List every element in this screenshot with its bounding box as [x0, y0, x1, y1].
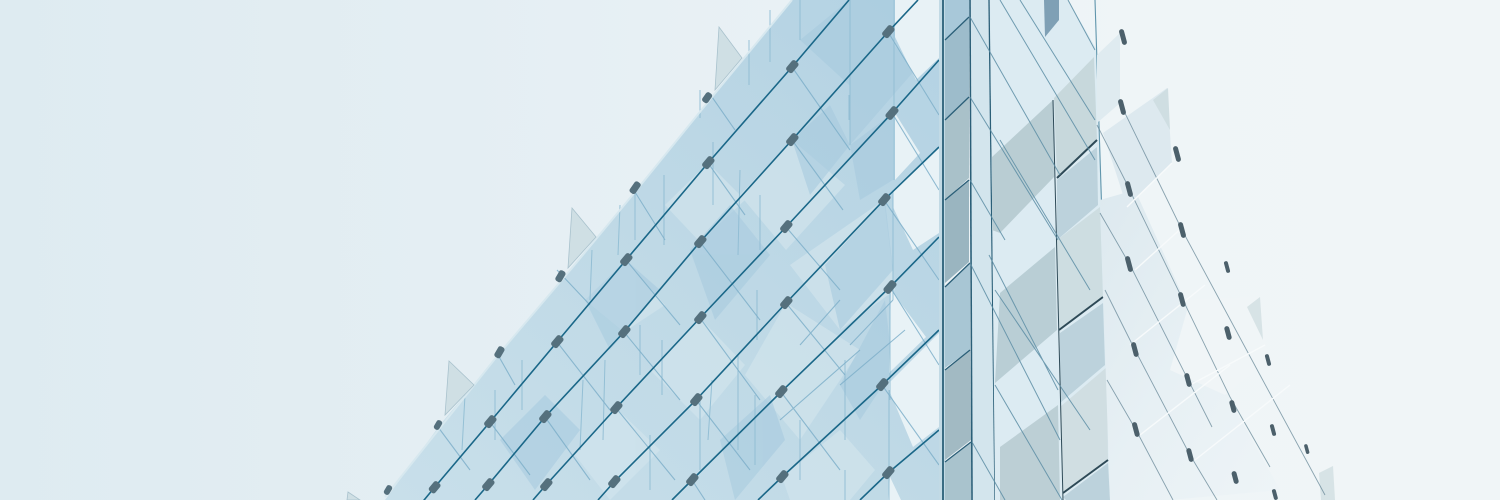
corner column: dark panels: [945, 0, 969, 40]
right facade: dark panel edges: [1053, 100, 1108, 500]
left facade: chevron pane edges: [438, 32, 939, 500]
right wing: pale glass panes: [1097, 33, 1120, 123]
right facade: right edge line: [1095, 0, 1111, 500]
right facade: diagonal lines: [970, 0, 1095, 500]
mounting bolts on left facade: [383, 24, 900, 496]
left facade: top silhouette highlight: [385, 0, 792, 497]
right glass wing fading into the sky: [1097, 33, 1335, 500]
left facade: glass base: [385, 0, 943, 500]
left facade: bright white panes at the corner: [888, 0, 939, 500]
right wing: thin dark lines: [1097, 107, 1325, 500]
right facade of the building: [970, 0, 1111, 500]
right facade: glass base: [990, 0, 1111, 500]
left facade of the building: [385, 0, 943, 500]
left facade: dark diagonal mullions: [420, 0, 939, 500]
right facade: blue panels: [1057, 147, 1098, 240]
right facade: grey panels: [1054, 57, 1097, 178]
right wing: white pane edges: [1127, 163, 1290, 460]
corner column: light strip: [970, 0, 1000, 500]
corner column: dark vertical and diagonal lines: [943, 0, 995, 500]
right facade: small dark block at top: [1044, 0, 1059, 37]
corner column: [939, 0, 1000, 500]
left facade: light diamond panes: [575, 140, 895, 500]
left facade: vertical pane edges: [462, 0, 894, 500]
triangular glass fins on the left edge: [347, 27, 742, 500]
right wing: grey fins: [1153, 88, 1170, 130]
mounting bolts on right wing: [1118, 29, 1310, 500]
left facade: dark diamond panes: [500, 0, 915, 500]
